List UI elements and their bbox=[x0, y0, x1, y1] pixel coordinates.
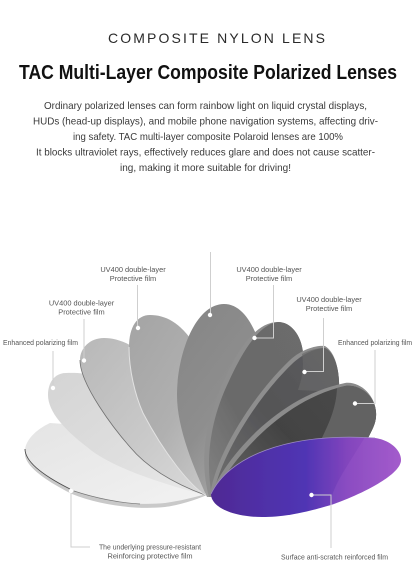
lens fan diagram bbox=[25, 304, 401, 517]
callout: UV400 double-layer, upper left: UV400 double-layer bbox=[100, 265, 166, 274]
intro paragraph bbox=[33, 101, 378, 174]
lens 9: purple surface anti-scratch film bbox=[211, 437, 401, 517]
lens 8: enhanced polarizing film bbox=[210, 383, 376, 497]
lens 4: UV400 film bbox=[129, 315, 215, 495]
callout: enhanced polarizing film, left bbox=[3, 338, 78, 390]
callout: enhanced polarizing film, right bbox=[338, 338, 412, 406]
intro paragraph: ing safety. TAC multi-layer composite Polaroid lenses are 100% bbox=[73, 132, 343, 143]
lens 7: UV400 film bbox=[210, 346, 339, 497]
lens 2: enhanced polarizing film bbox=[48, 373, 205, 495]
intro paragraph: HUDs (head-up displays), and mobile phone navigation systems, affecting driv- bbox=[33, 116, 378, 128]
callout: UV400 double-layer, left: UV400 double-layer bbox=[49, 298, 115, 308]
lens 3: UV400 film bbox=[80, 338, 205, 495]
callout: UV400 double-layer, upper left bbox=[100, 265, 166, 330]
callout: UV400 double-layer, right: Protective film bbox=[306, 304, 352, 313]
callout: enhanced polarizing film, left: Enhanced polarizing film bbox=[3, 338, 78, 347]
callout: surface anti-scratch film: Surface anti-scratch reinforced film bbox=[281, 552, 388, 562]
callout: surface anti-scratch film bbox=[281, 493, 388, 562]
callout: underlying reinforcing film: The underlying pressure-resistant bbox=[99, 542, 201, 552]
intro paragraph: It blocks ultraviolet rays, effectively reduces glare and does not cause scatter- bbox=[36, 148, 375, 158]
lens 5: central film bbox=[177, 304, 262, 497]
callout: centre film leader bbox=[208, 252, 212, 317]
callout: UV400 double-layer, upper right: Protective film bbox=[246, 274, 292, 283]
callout: UV400 double-layer, upper left: Protective film bbox=[110, 274, 156, 283]
lens 1: underlying reinforcing film bbox=[25, 423, 207, 508]
callout: UV400 double-layer, left bbox=[49, 298, 115, 363]
callout: UV400 double-layer, right bbox=[296, 295, 362, 374]
kicker: composite nylon lens: COMPOSITE NYLON LENS bbox=[108, 30, 325, 46]
intro paragraph: Ordinary polarized lenses can form rainbow light on liquid crystal displays, bbox=[44, 101, 367, 112]
callout: underlying reinforcing film: Reinforcing protective film bbox=[107, 552, 193, 560]
callout: UV400 double-layer, upper right bbox=[236, 265, 302, 340]
callout: UV400 double-layer, right: UV400 double-layer bbox=[296, 295, 362, 304]
callout: UV400 double-layer, left: Protective film bbox=[58, 308, 105, 316]
callout: underlying reinforcing film bbox=[69, 489, 201, 560]
lens 6: UV400 film bbox=[204, 322, 303, 497]
callout: UV400 double-layer, upper right: UV400 double-layer bbox=[236, 265, 302, 274]
intro paragraph: ing, making it more suitable for driving! bbox=[120, 163, 291, 174]
